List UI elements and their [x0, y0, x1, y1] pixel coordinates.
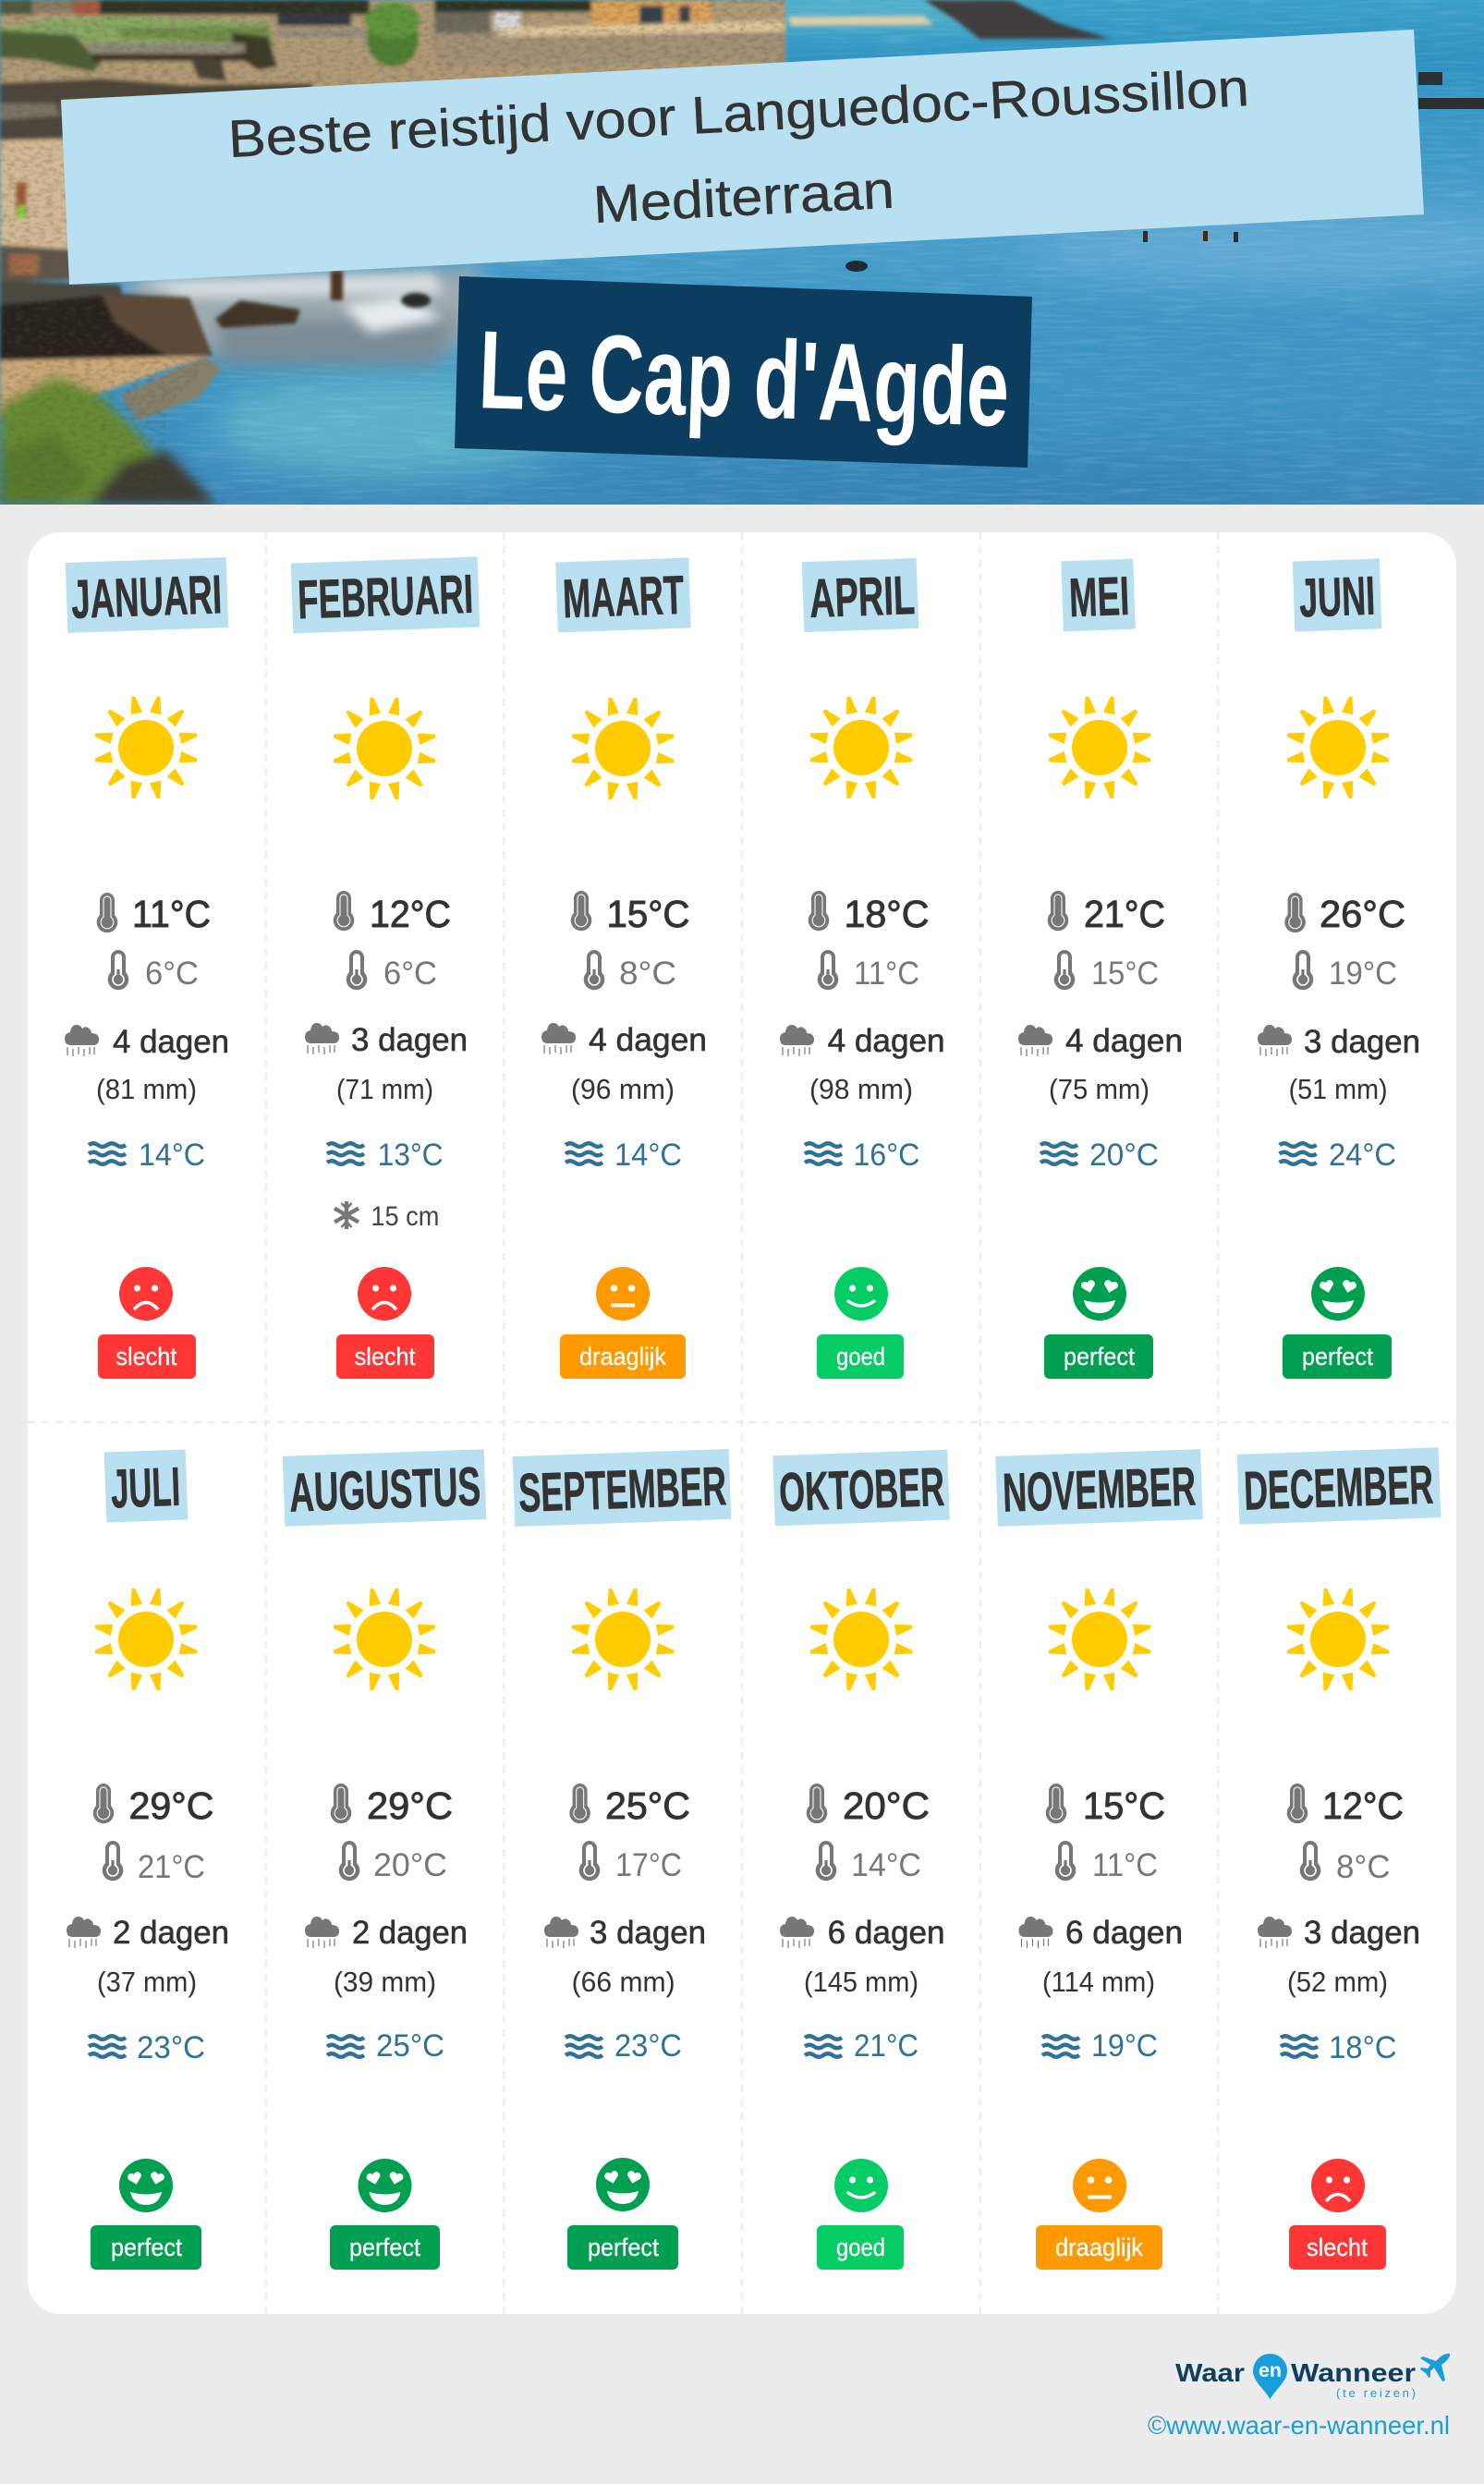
rainfall: (98 mm) — [809, 1073, 913, 1105]
max temperature — [1287, 1784, 1404, 1827]
min temperature: 17°C — [615, 1847, 682, 1883]
heading: januari — [66, 557, 228, 633]
rating: goed: goed — [836, 2234, 885, 2261]
max temperature — [569, 1784, 690, 1827]
max temperature — [97, 893, 211, 935]
rating: perfect — [1044, 1267, 1153, 1379]
heading: november — [995, 1449, 1203, 1527]
max temperature: 15°C — [606, 893, 689, 935]
min temperature — [1300, 1841, 1390, 1885]
panel: januari — [65, 557, 229, 1379]
rating: perfect: perfect — [1302, 1343, 1373, 1370]
rating: slecht — [1289, 2159, 1386, 2270]
title banner — [61, 30, 1424, 285]
rainfall: (81 mm) — [96, 1073, 197, 1105]
min temperature — [584, 950, 676, 992]
sea temperature — [566, 2028, 682, 2064]
sea temperature: 20°C — [1089, 1138, 1159, 1173]
min temperature: 19°C — [1329, 956, 1397, 992]
min temperature: 8°C — [619, 956, 676, 992]
rating: perfect — [1283, 1267, 1392, 1379]
rain days: 2 dagen — [352, 1915, 468, 1951]
rainfall: (52 mm) — [1287, 1966, 1388, 1998]
min temperature: 11°C — [1092, 1847, 1158, 1883]
min temperature: 6°C — [145, 956, 199, 992]
max temperature: 12°C — [1322, 1784, 1404, 1827]
icon: sun — [572, 698, 674, 799]
sea temperature — [89, 2030, 205, 2065]
rating: slecht: slecht — [1307, 2234, 1368, 2261]
rainfall: (96 mm) — [571, 1073, 675, 1105]
hero photo: coastal scene — [0, 0, 1484, 518]
icon: sun — [95, 697, 197, 798]
sea temperature: 13°C — [378, 1138, 444, 1173]
rating: perfect: perfect — [588, 2234, 659, 2261]
min temperature — [1293, 950, 1397, 992]
heading: augustus — [283, 1449, 486, 1527]
heading: februari: FEBRUARI — [297, 564, 474, 630]
panel: december — [1237, 1447, 1441, 2270]
icon: map pin: en — [1259, 2360, 1282, 2381]
icon: sun — [572, 1589, 674, 1690]
min temperature — [108, 950, 199, 992]
snow: 15 cm — [371, 1201, 439, 1232]
icon: sun — [1287, 1589, 1389, 1690]
rain days: 6 dagen — [828, 1915, 945, 1951]
panel: month grid card — [28, 532, 1456, 2314]
rating: perfect — [330, 2159, 440, 2270]
rain days: 3 dagen — [351, 1022, 468, 1058]
max temperature — [809, 891, 930, 935]
icon: sun — [1049, 1589, 1150, 1690]
rating: draaglijk: draaglijk — [579, 1343, 666, 1370]
min temperature: 8°C — [1336, 1849, 1390, 1885]
rain days: 4 dagen — [1065, 1023, 1183, 1059]
rain days: 4 dagen — [828, 1023, 945, 1059]
panel: oktober — [772, 1450, 950, 2270]
heading: augustus: AUGUSTUS — [288, 1455, 481, 1524]
sea temperature: 21°C — [854, 2028, 918, 2064]
rain days: 4 dagen — [589, 1022, 707, 1058]
heading: juni: JUNI — [1298, 566, 1376, 628]
logo: Waar en Wanneer — [1175, 2354, 1450, 2400]
max temperature: 25°C — [605, 1784, 690, 1827]
panel: augustus — [283, 1449, 486, 2270]
icon: plane — [1420, 2354, 1450, 2381]
heading: april: APRIL — [809, 565, 916, 629]
panel: november — [995, 1449, 1203, 2270]
rainfall: (114 mm) — [1042, 1966, 1155, 1998]
max temperature: 29°C — [129, 1784, 214, 1827]
rating: goed — [817, 1267, 904, 1379]
snow — [335, 1201, 439, 1232]
min temperature: 6°C — [383, 956, 437, 992]
icon: sun — [334, 698, 435, 799]
icon: sun — [1287, 697, 1389, 798]
heading: juli — [104, 1449, 188, 1523]
sea temperature: 23°C — [137, 2030, 205, 2065]
rating: slecht — [98, 1267, 196, 1379]
heading: januari: JANUARI — [70, 564, 223, 630]
max temperature — [93, 1784, 214, 1827]
heading: mei: MEI — [1068, 566, 1130, 628]
rainfall: (39 mm) — [334, 1966, 436, 1998]
max temperature: 20°C — [843, 1784, 930, 1827]
max temperature — [334, 891, 451, 935]
heading: juni — [1293, 558, 1381, 632]
sea temperature — [805, 1138, 919, 1173]
panel: maart — [541, 558, 707, 1379]
heading: september: SEPTEMBER — [517, 1455, 727, 1524]
rating: perfect: perfect — [111, 2234, 182, 2261]
rating: draaglijk: draaglijk — [1055, 2234, 1143, 2261]
rating: draaglijk — [1036, 2159, 1162, 2270]
max temperature: 21°C — [1084, 893, 1165, 935]
rating: perfect: perfect — [1064, 1343, 1135, 1370]
rating: slecht — [336, 1267, 434, 1379]
rainfall: (71 mm) — [336, 1073, 433, 1105]
max temperature: 15°C — [1083, 1784, 1165, 1827]
rainfall: (37 mm) — [97, 1966, 197, 1998]
min temperature: 20°C — [373, 1847, 447, 1883]
rainfall: (145 mm) — [804, 1966, 918, 1998]
icon: sun — [810, 1589, 912, 1690]
destination banner — [455, 276, 1032, 468]
title line 2: Mediterraan — [591, 161, 895, 235]
sea temperature — [327, 2028, 444, 2064]
heading: november: NOVEMBER — [1002, 1455, 1197, 1524]
max temperature: 12°C — [370, 893, 451, 935]
rain days: 3 dagen — [1304, 1024, 1420, 1060]
max temperature — [331, 1784, 453, 1827]
sea temperature: 23°C — [614, 2028, 682, 2064]
min temperature: 15°C — [1091, 956, 1159, 992]
rating: perfect — [91, 2159, 201, 2270]
rainfall: (75 mm) — [1049, 1073, 1149, 1105]
panel: juli — [67, 1449, 229, 2270]
max temperature — [807, 1784, 930, 1827]
sea temperature: 14°C — [139, 1138, 205, 1173]
sea temperature: 25°C — [376, 2028, 444, 2064]
heading: oktober — [772, 1450, 950, 1526]
min temperature — [1054, 950, 1159, 992]
rating: perfect — [567, 2158, 678, 2270]
min temperature — [347, 950, 437, 992]
sea temperature: 24°C — [1329, 1138, 1396, 1173]
sea temperature — [1281, 2030, 1397, 2065]
rating: draaglijk — [560, 1267, 686, 1379]
rating: goed — [817, 2159, 904, 2270]
rainfall: (51 mm) — [1289, 1073, 1388, 1105]
panel: september — [513, 1449, 731, 2270]
min temperature — [818, 950, 919, 992]
icon: sun — [810, 697, 912, 798]
icon: sun — [95, 1589, 197, 1690]
heading: mei — [1061, 559, 1136, 631]
min temperature: 14°C — [851, 1847, 921, 1883]
sea temperature — [566, 1138, 682, 1173]
min temperature — [339, 1841, 447, 1883]
sea temperature: 19°C — [1091, 2028, 1158, 2064]
max temperature — [1048, 891, 1165, 935]
panel: juni — [1258, 558, 1420, 1379]
panel: april — [780, 558, 945, 1379]
max temperature — [1046, 1784, 1165, 1827]
rain days: 6 dagen — [1065, 1915, 1183, 1951]
icon: map pin — [1253, 2354, 1287, 2399]
source url: ©www.waar-en-wanneer.nl — [1148, 2411, 1450, 2440]
rating: perfect: perfect — [349, 2234, 420, 2261]
max temperature: 26°C — [1320, 893, 1405, 935]
sea temperature — [1042, 2028, 1158, 2064]
min temperature: 21°C — [138, 1849, 205, 1885]
destination banner: Le Cap d'Agde — [477, 308, 1011, 450]
logo: Waar en Wanneer: Waar — [1175, 2358, 1245, 2387]
sea temperature — [89, 1138, 205, 1173]
sea temperature: 14°C — [614, 1138, 682, 1173]
icon: sun — [1049, 697, 1150, 798]
rating: slecht: slecht — [116, 1343, 177, 1370]
logo: Waar en Wanneer: Wanneer — [1291, 2358, 1416, 2387]
rain days: 4 dagen — [113, 1024, 229, 1060]
min temperature — [103, 1841, 205, 1885]
logo: Waar en Wanneer: (te reizen) — [1336, 2386, 1416, 2400]
sea temperature — [1040, 1138, 1159, 1173]
min temperature — [579, 1841, 682, 1883]
panel: februari — [291, 556, 480, 1379]
min temperature: 11°C — [854, 956, 919, 992]
icon: sun — [334, 1589, 435, 1690]
heading: oktober: OKTOBER — [778, 1456, 945, 1523]
title line 1: Beste reistijd voor Languedoc-Roussillon — [226, 58, 1250, 169]
panel: mei — [1018, 559, 1183, 1379]
max temperature — [571, 891, 689, 935]
rating: goed: goed — [836, 1343, 885, 1370]
rainfall: (66 mm) — [572, 1966, 675, 1998]
sea temperature — [805, 2028, 918, 2064]
heading: april — [802, 558, 918, 632]
max temperature: 29°C — [367, 1784, 453, 1827]
rating: slecht: slecht — [355, 1343, 416, 1370]
max temperature: 18°C — [845, 893, 930, 935]
sea temperature — [327, 1138, 444, 1173]
min temperature — [816, 1841, 921, 1883]
rain days: 3 dagen — [1304, 1915, 1420, 1951]
heading: maart — [555, 558, 691, 632]
heading: februari — [291, 556, 480, 634]
rain days: 3 dagen — [590, 1915, 706, 1951]
heading: maart: MAART — [562, 565, 685, 629]
heading: september — [513, 1449, 731, 1527]
sea temperature: 18°C — [1329, 2030, 1397, 2065]
max temperature: 11°C — [132, 893, 211, 935]
sea temperature — [1280, 1138, 1396, 1173]
sea temperature: 16°C — [853, 1138, 919, 1173]
heading: juli: JULI — [110, 1456, 181, 1519]
rain days: 2 dagen — [113, 1915, 229, 1951]
min temperature — [1055, 1841, 1158, 1883]
